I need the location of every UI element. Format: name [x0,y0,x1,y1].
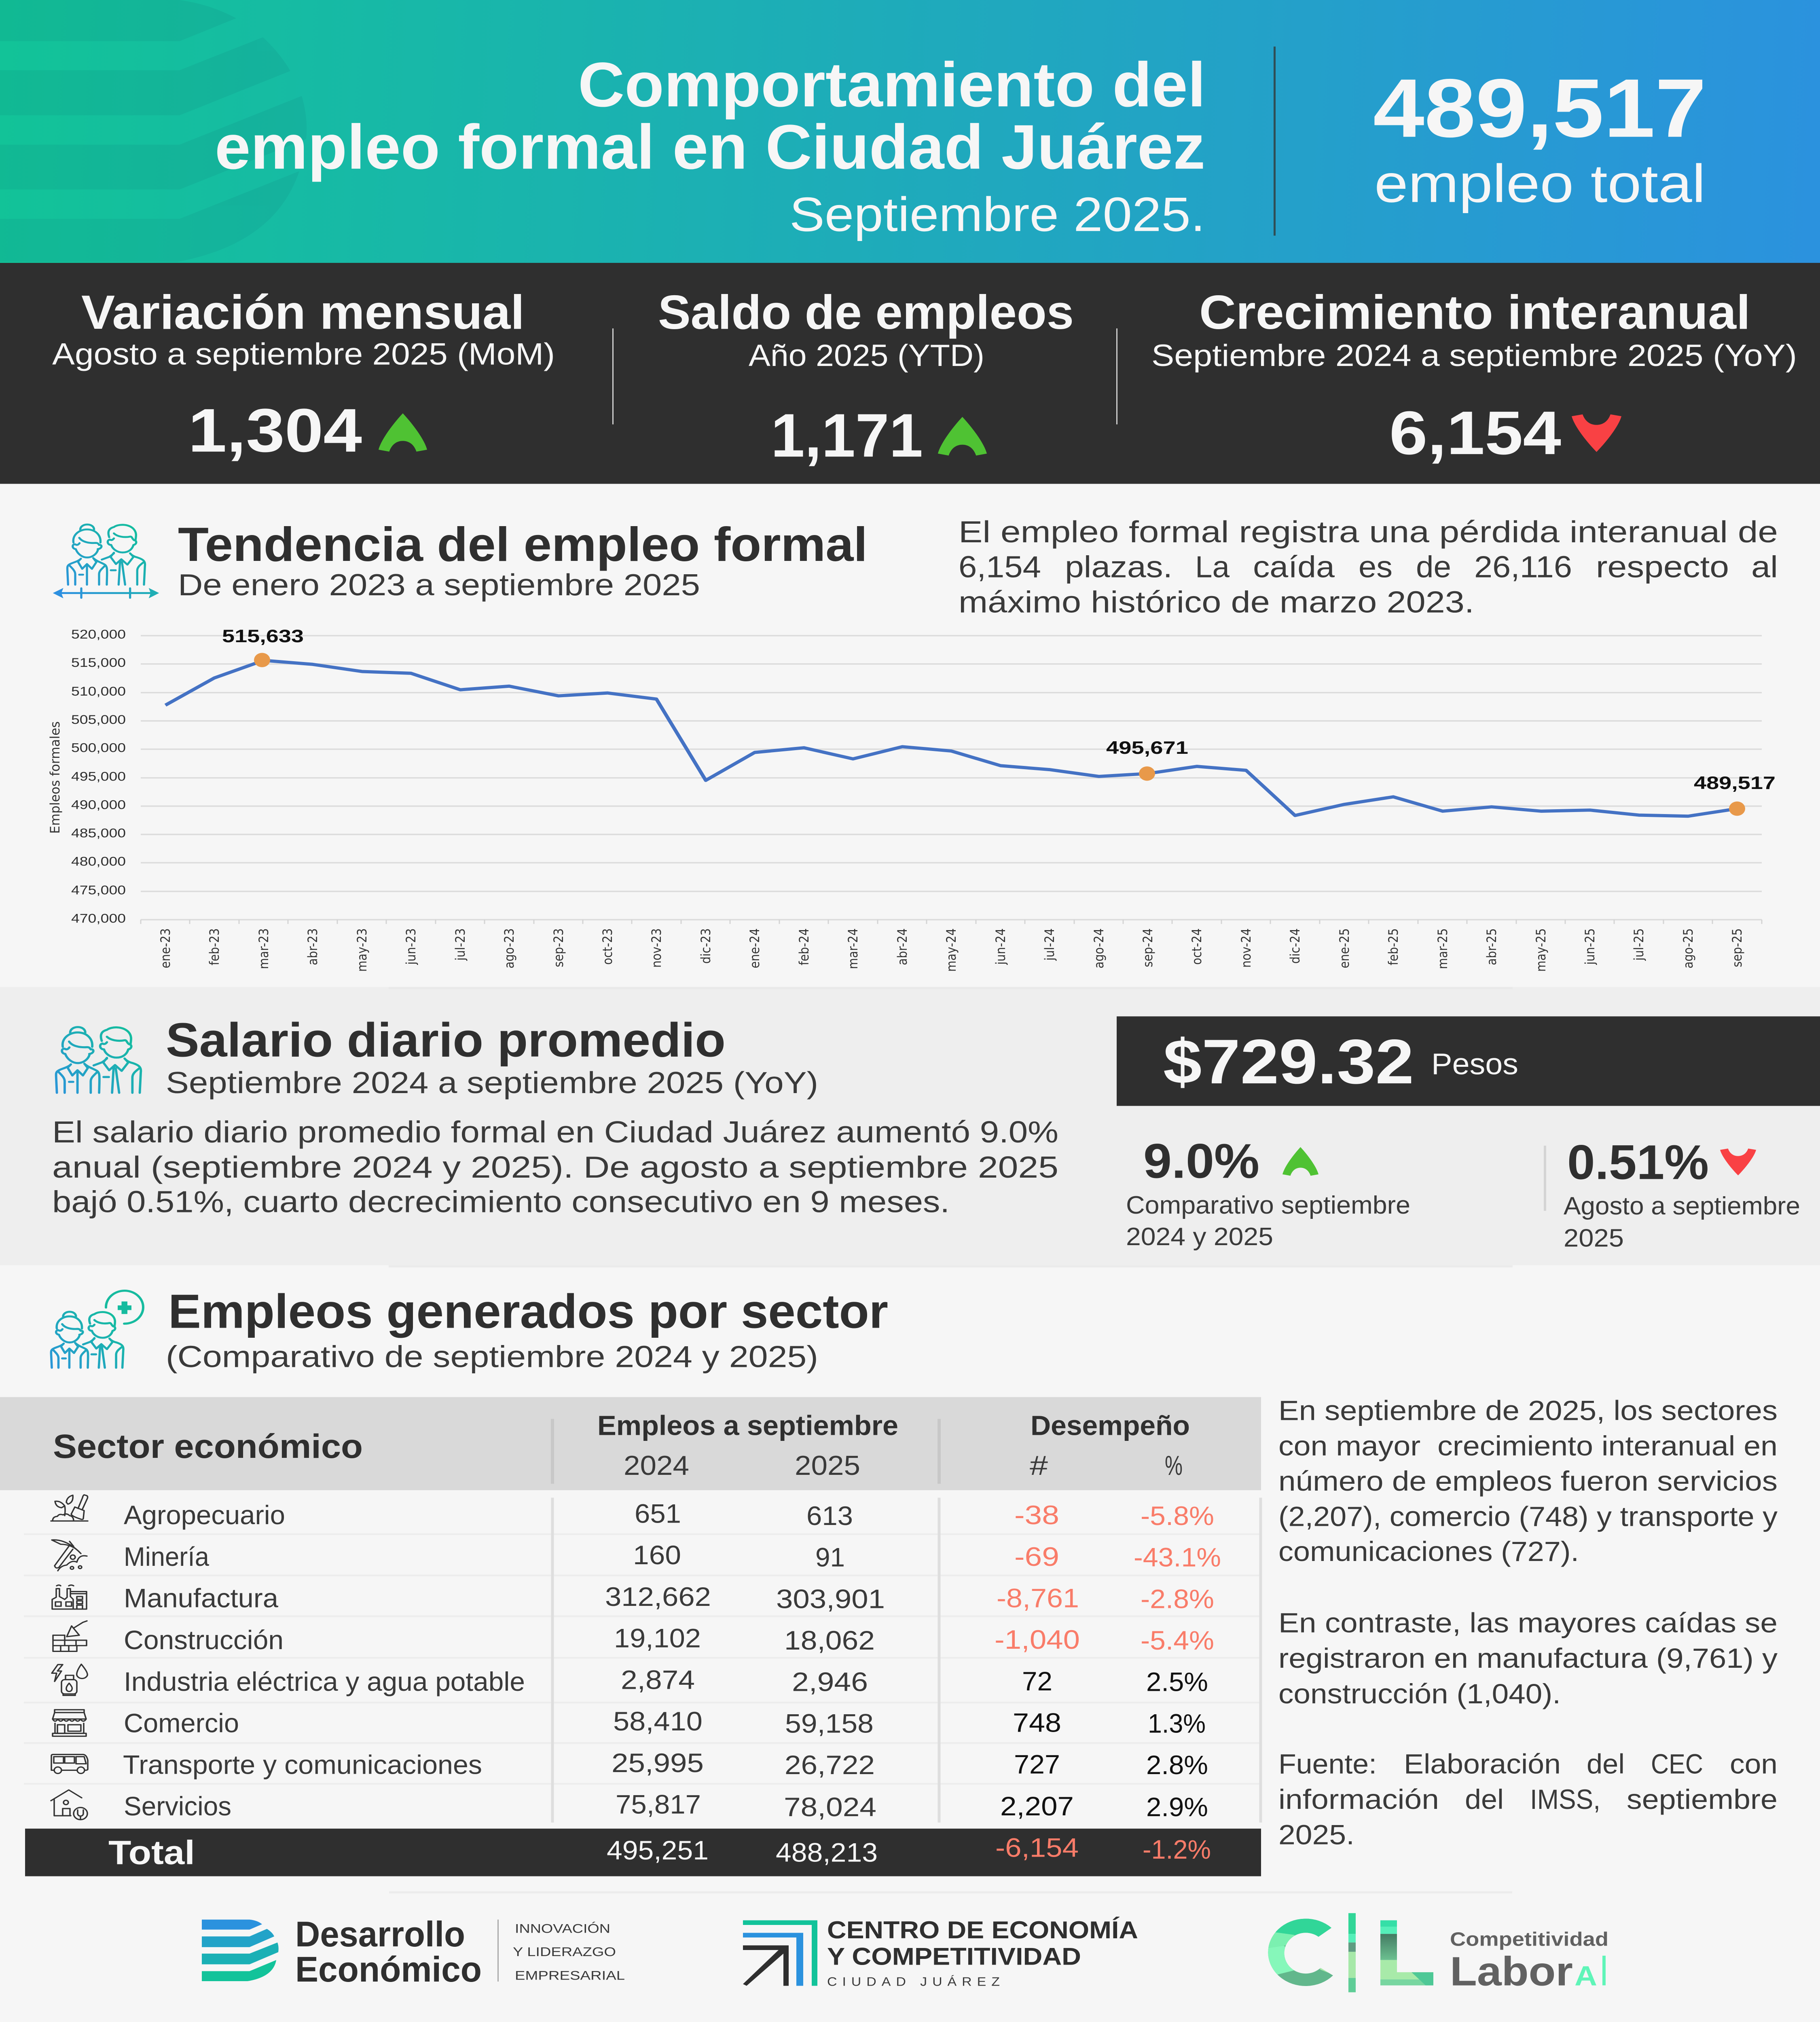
row: servicios [51,1790,1208,1822]
data point: mar-23: 515,633 [222,626,304,646]
row: total: -6,154 [995,1833,1079,1863]
row: industria eléctrica y agua potable: 72 [1022,1667,1052,1696]
text block: sector commentary: Fuente: [1278,1748,1377,1779]
text block: trend summary: al [1751,550,1778,584]
logo: Competitividad Laboral: Labor [1450,1949,1573,1994]
logo: Desarrollo Económico [202,1914,625,1990]
table header: Desempeño [1031,1410,1190,1441]
heading: empleos por sector: (Comparativo de septiembre 2024 y 2025) [166,1340,818,1374]
row: manufactura: -8,761 [997,1583,1079,1613]
text block: trend summary: máximo histórico de marzo 2023. [959,585,1474,619]
text block: sector commentary: con [1730,1748,1778,1779]
y axis title: Empleos formales [48,721,63,834]
stat: 9.0% [1126,1134,1410,1251]
y axis labels: 485,000 [71,826,126,840]
heading: salario: Septiembre 2024 a septiembre 2025 (YoY) [166,1066,818,1100]
row: total [25,1829,1261,1876]
heading: tendencia: De enero 2023 a septiembre 2025 [178,568,700,602]
icon: house and wrench [51,1790,87,1820]
row: industria eléctrica y agua potable: 2,874 [621,1665,695,1694]
row: servicios: 75,817 [616,1790,701,1819]
x axis labels: mar-24 [846,928,861,969]
x axis labels: abr-25 [1484,928,1499,965]
salary value box: $729.32 [1163,1027,1414,1097]
icon: factory [52,1585,87,1609]
stat: 0.51%: 0.51% [1567,1136,1709,1190]
row: servicios: 2.9% [1146,1792,1208,1822]
row: construcción: 19,102 [614,1624,701,1653]
text block: trend summary: El empleo formal registra una pérdida interanual de [959,515,1778,549]
x axis labels: sep-25 [1730,928,1745,967]
x axis labels: ene-24 [747,928,762,969]
row: transporte y comunicaciones: 2.8% [1146,1750,1208,1780]
x axis labels: jul-24 [1042,928,1057,961]
text block: trend summary: plazas. [1065,550,1172,584]
row: transporte y comunicaciones: Transporte y comunicaciones [123,1750,482,1779]
x axis labels: mar-25 [1435,928,1450,969]
x axis labels [158,928,1745,972]
text block: trend summary: 26,116 [1474,550,1572,584]
logo: Centro de Economía y Competitividad: CIUDAD JUÁREZ [827,1975,1000,1988]
stat: 9.0%: Comparativo septiembre [1126,1191,1410,1219]
icon: shovel and plant [51,1495,88,1521]
KPI: crecimiento interanual [1151,285,1797,467]
table header: Sector económico [53,1428,363,1465]
row: transporte y comunicaciones: 26,722 [785,1750,875,1780]
line chart: empleo formal [48,626,1776,972]
salary value box [1117,1016,1820,1106]
KPI: saldo de empleos [658,285,1074,470]
y axis labels: 505,000 [71,713,126,727]
text block: sector commentary: del [1465,1783,1504,1815]
x axis labels: nov-23 [649,928,664,968]
heading: empleos por sector: Empleos generados por sector [168,1284,888,1338]
data point: sep-25: 489,517 [1694,773,1776,793]
heading: salario [166,1013,818,1100]
text block: salario: anual (septiembre 2024 y 2025). De agosto a septiembre 2025 [52,1150,1058,1184]
logo: Desarrollo Económico: INNOVACIÓN [515,1921,610,1936]
x axis labels: jul-25 [1632,928,1646,961]
row: minería: Minería [124,1542,209,1571]
x axis labels: nov-24 [1239,928,1254,968]
row: minería: -43.1% [1134,1542,1221,1572]
header banner [0,0,1820,263]
logo: Competitividad Laboral [1262,1912,1608,1995]
text block: trend summary: La [1195,550,1230,584]
text block: trend summary: caída [1253,550,1335,584]
x axis labels: may-23 [355,928,370,972]
logo: Desarrollo Económico: Económico [295,1949,482,1990]
row: manufactura: 303,901 [776,1584,885,1614]
text block: sector commentary: del [1587,1748,1625,1779]
title [215,50,1206,241]
text block: salario [52,1115,1058,1219]
y axis labels: 495,000 [71,769,126,784]
row: minería: 91 [815,1542,845,1572]
text block: salario: El salario diario promedio formal en Ciudad Juárez aumentó 9.0% [52,1115,1058,1149]
KPI: saldo de empleos: Año 2025 (YTD) [749,338,984,373]
row: servicios: Servicios [124,1791,231,1821]
row: total: -1.2% [1143,1835,1211,1864]
x axis labels: jun-25 [1583,928,1598,965]
row: servicios: 78,024 [784,1792,876,1822]
KPI: variación mensual: 1,304 [188,396,362,465]
icon: bricks and trowel [53,1621,87,1651]
text block: sector commentary [1278,1395,1778,1851]
row: industria eléctrica y agua potable: Industria eléctrica y agua potable [124,1667,525,1696]
row: agropecuario: -5.8% [1141,1501,1214,1531]
icon: people with plus [51,1291,143,1368]
logo: Desarrollo Económico: Desarrollo [295,1914,465,1954]
x axis labels: feb-24 [797,928,812,965]
row: minería: 160 [633,1540,681,1570]
KPI: variación mensual: Variación mensual [81,285,525,339]
row: minería [52,1540,1221,1572]
row: total: 495,251 [607,1836,709,1865]
row: manufactura [52,1582,1214,1614]
x axis labels: ago-23 [502,928,517,969]
icon: bus [51,1754,88,1773]
row: comercio: Comercio [124,1708,239,1738]
y axis labels: 490,000 [71,797,126,812]
KPI: crecimiento interanual: Septiembre 2024 a septiembre 2025 (YoY) [1151,338,1797,373]
text block: sector commentary: construcción (1,040). [1278,1678,1561,1709]
x axis labels: dic-24 [1288,928,1303,964]
KPI: saldo de empleos: Saldo de empleos [658,285,1074,339]
logo: Desarrollo Económico: EMPRESARIAL [515,1968,625,1983]
logo: Centro de Economía y Competitividad [743,1916,1138,1988]
text block: sector commentary: con mayor crecimiento interanual en [1278,1430,1778,1462]
text block: trend summary: 6,154 [959,550,1041,584]
row: comercio: 1.3% [1148,1709,1206,1739]
row: comercio [53,1707,1206,1739]
x axis labels: may-25 [1534,928,1549,972]
row: construcción: Construcción [124,1625,284,1655]
x axis labels: sep-23 [551,928,566,967]
total employment figure: empleo total [1374,154,1706,214]
table header: % [1165,1451,1183,1481]
row: transporte y comunicaciones: 25,995 [612,1748,704,1778]
y axis labels: 475,000 [71,883,126,897]
stat: 0.51%: Agosto a septiembre [1564,1192,1800,1220]
data point: sep-24 [1106,738,1188,781]
text block: sector commentary: IMSS, [1530,1783,1600,1815]
text block: sector commentary: número de empleos fueron servicios [1278,1465,1778,1497]
row: manufactura: -2.8% [1141,1584,1214,1614]
row: industria eléctrica y agua potable: 2.5% [1146,1667,1208,1697]
text block: sector commentary: información [1278,1783,1439,1815]
stat: 9.0%: 2024 y 2025 [1126,1223,1273,1251]
heading: salario: Salario diario promedio [166,1013,726,1067]
text block: sector commentary: registraron en manufactura (9,761) y [1278,1642,1778,1674]
text block: sector commentary: 2025. [1278,1819,1354,1851]
x axis labels: ago-24 [1092,928,1107,969]
row: transporte y comunicaciones [51,1748,1208,1780]
x axis labels: may-24 [944,928,959,972]
logo: Desarrollo Económico: Y LIDERAZGO [513,1945,616,1959]
row: industria eléctrica y agua potable: 2,946 [792,1667,868,1697]
x axis labels: ene-23 [158,928,173,969]
salary value box: Pesos [1431,1047,1518,1081]
table header [0,1397,1261,1490]
table header: Empleos a septiembre [597,1410,898,1441]
text block: sector commentary: Elaboración [1404,1748,1561,1779]
x axis labels: abr-23 [305,928,320,965]
row: comercio: 58,410 [613,1707,703,1736]
table header: # [1030,1451,1048,1481]
x axis labels: ago-25 [1681,928,1696,969]
data point: sep-25 [1694,773,1776,816]
row: construcción: -5.4% [1141,1626,1214,1655]
KPI: crecimiento interanual: 6,154 [1389,399,1561,467]
row: agropecuario [51,1495,1214,1531]
y axis labels: 470,000 [71,911,126,926]
decorative logo chevrons [0,0,307,262]
logo: Competitividad Laboral: Competitividad [1450,1928,1608,1950]
text block: trend summary: respecto [1596,550,1729,584]
heading: tendencia: Tendencia del empleo formal [178,517,868,571]
logo: Centro de Economía y Competitividad: CENTRO DE ECONOMÍA [827,1916,1138,1944]
y axis labels: 515,000 [71,656,126,670]
text block: trend summary [959,515,1778,619]
text block: sector commentary: En contraste, las mayores caídas se [1278,1607,1778,1638]
row: servicios: 2,207 [1000,1791,1074,1821]
text block: sector commentary: (2,207), comercio (748) y transporte y [1278,1501,1778,1532]
text block: trend summary: de [1416,550,1451,584]
x axis labels: dic-23 [698,928,713,964]
icon: people [56,1027,141,1093]
table header: 2025 [795,1451,860,1481]
y axis labels: 480,000 [71,854,126,869]
x axis labels: oct-24 [1189,928,1204,965]
icon: people with timeline [53,525,159,598]
x axis labels: sep-24 [1141,928,1155,967]
row: total: Total [108,1834,195,1871]
x axis labels: abr-24 [895,928,910,965]
stat: 0.51%: 2025 [1564,1224,1624,1252]
x axis labels: ene-25 [1337,928,1352,969]
row: minería: -69 [1014,1542,1059,1571]
x axis labels: mar-23 [256,928,271,969]
x axis labels: oct-23 [600,928,615,965]
logo: Competitividad Laboral: A [1575,1960,1597,1992]
text block: sector commentary: En septiembre de 2025, los sectores [1278,1395,1778,1426]
KPI: crecimiento interanual: Crecimiento interanual [1199,285,1750,339]
KPI: variación mensual: Agosto a septiembre 2025 (MoM) [52,337,555,371]
row: transporte y comunicaciones: 727 [1014,1749,1060,1779]
title: Septiembre 2025. [789,188,1205,241]
heading: tendencia [178,517,868,602]
panel: salario diario promedio [0,987,1820,1267]
y axis labels: 510,000 [71,684,126,698]
row: industria eléctrica y agua potable [52,1664,1208,1697]
x axis labels: feb-25 [1386,928,1401,965]
title: Comportamiento del [578,50,1206,120]
row: manufactura: 312,662 [605,1582,711,1612]
total employment figure [1373,62,1706,214]
title: empleo formal en Ciudad Juárez [215,112,1205,182]
row: construcción: -1,040 [995,1625,1080,1654]
stat: 0.51% [1564,1136,1800,1252]
icon: pickaxe [52,1540,87,1571]
x axis labels: jul-23 [453,928,468,961]
text block: salario: bajó 0.51%, cuarto decrecimiento consecutivo en 9 meses. [52,1185,950,1219]
x axis labels: feb-23 [207,928,222,965]
row: comercio: 748 [1013,1708,1061,1738]
row: agropecuario: -38 [1014,1500,1059,1530]
table: empleo por sector [0,1397,1261,1876]
logo: Competitividad Laboral: l [1601,1949,1607,1994]
data point: mar-23 [222,626,304,667]
text block: trend summary: es [1359,550,1393,584]
row: construcción [53,1621,1214,1655]
icon: bolt, gas and drop [52,1664,87,1695]
text block: sector commentary: septiembre [1627,1783,1778,1815]
data line [165,660,1737,816]
table header: 2024 [624,1451,689,1481]
heading: empleos por sector [166,1284,888,1374]
x axis labels: jun-24 [993,928,1008,965]
stat: 9.0%: 9.0% [1143,1134,1259,1189]
x axis labels: jun-23 [404,928,419,965]
KPI band [0,263,1820,484]
row: agropecuario: 613 [806,1501,853,1531]
total employment figure: 489,517 [1373,62,1706,154]
logo: Centro de Economía y Competitividad: Y COMPETITIVIDAD [827,1943,1081,1970]
icon: store [53,1710,86,1736]
row: agropecuario: 651 [635,1499,681,1529]
text block: sector commentary: CEC [1651,1748,1703,1779]
row: manufactura: Manufactura [124,1583,278,1613]
row: construcción: 18,062 [784,1626,875,1655]
row: agropecuario: Agropecuario [124,1500,285,1530]
KPI: saldo de empleos: 1,171 [771,401,923,470]
y axis labels [71,627,126,926]
KPI: variación mensual [52,285,555,465]
row: comercio: 59,158 [785,1709,874,1739]
data point: sep-24: 495,671 [1106,738,1188,758]
y axis labels: 500,000 [71,741,126,755]
text block: sector commentary: comunicaciones (727). [1278,1536,1579,1567]
row: total: 488,213 [776,1838,878,1867]
y axis labels: 520,000 [71,627,126,641]
